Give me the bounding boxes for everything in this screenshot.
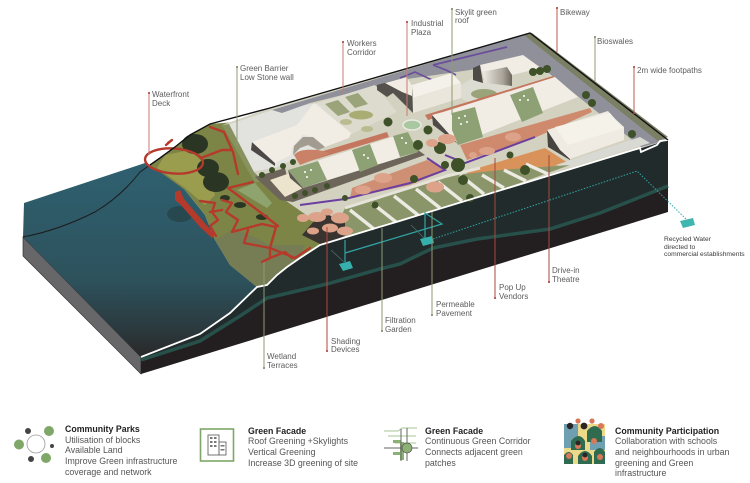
- legend: community parks: [14, 424, 178, 477]
- callout: shading devices: Shading: [331, 337, 360, 346]
- back edge: [150, 33, 668, 165]
- front section face: [141, 140, 668, 374]
- salmon plaza centre: [350, 160, 447, 198]
- storage tank three: [680, 218, 695, 228]
- text: community participation: Collaboration with schools: [615, 436, 718, 446]
- callout: skylit green roof: [451, 8, 497, 115]
- text: green facade roof: Green Facade: [248, 426, 306, 436]
- callout: waterfront deck: Deck: [152, 99, 171, 108]
- text: community parks: Utilisation of blocks: [65, 435, 141, 445]
- water body: [23, 163, 257, 357]
- gravel yard: [227, 103, 351, 172]
- salmon plaza right: [460, 108, 592, 160]
- legend: green corridor: [384, 426, 531, 468]
- text: community participation: infrastructure: [615, 468, 666, 478]
- callout: green barrier: Green Barrier: [240, 64, 289, 73]
- palm and canopy trees: [259, 65, 636, 208]
- text: green facade roof: Vertical Greening: [248, 447, 316, 457]
- orange yard: [465, 148, 568, 183]
- callout: wetland terraces: Wetland: [267, 352, 296, 361]
- building C: [377, 73, 461, 113]
- callout: shading devices: Devices: [331, 345, 359, 354]
- back lane: [272, 33, 668, 147]
- callout: green barrier: [236, 64, 294, 146]
- garden beds: [330, 164, 570, 240]
- storage tank two: [420, 236, 434, 246]
- water feature: [403, 120, 421, 130]
- cream patch: [270, 173, 303, 197]
- plaza courtyard: [317, 85, 397, 135]
- text: community parks: Community Parks: [65, 424, 140, 434]
- legend: community participation: [564, 418, 730, 478]
- wetland land: [150, 122, 335, 287]
- callout: pop up vendors: Vendors: [499, 292, 528, 301]
- text: community parks: Available Land: [65, 445, 123, 455]
- salmon street back: [425, 76, 556, 120]
- text: community participation: greening and Green: [615, 458, 693, 468]
- brown road: [255, 150, 425, 202]
- text: green facade roof: [248, 426, 358, 468]
- site ground: [222, 33, 668, 245]
- callout: recycled water: commercial establishments: [664, 251, 745, 258]
- wetland trees: [182, 134, 268, 220]
- site block model: [23, 33, 695, 374]
- text: green facade roof: Increase 3D greening of site: [248, 458, 358, 468]
- callout: filtration garden: Garden: [385, 325, 412, 334]
- callout: permeable pavement: Permeable: [436, 300, 475, 309]
- callout: bikeway: [556, 7, 590, 52]
- text: green corridor: Connects adjacent green: [425, 447, 523, 457]
- text: community parks: coverage and network: [65, 467, 152, 477]
- callout: footpaths: [633, 66, 702, 114]
- text: community participation: [615, 426, 730, 478]
- text: green corridor: Green Facade: [425, 426, 483, 436]
- green band: [222, 124, 262, 183]
- back lane cycle path: [400, 47, 507, 88]
- salmon street: [300, 132, 389, 164]
- callout: bikeway: Bikeway: [560, 8, 590, 17]
- callout: workers corridor: Workers: [347, 39, 377, 48]
- shoreline contour: [23, 165, 150, 237]
- callout: pop up vendors: [494, 158, 528, 301]
- callout: workers corridor: Corridor: [347, 48, 376, 57]
- text: community parks: Improve Green infrastructure: [65, 456, 178, 466]
- red wetland boardwalks: [144, 127, 310, 262]
- groundwater stripe: [141, 186, 668, 360]
- groundwater layer: [141, 140, 668, 359]
- callout: recycled water: [664, 236, 745, 258]
- callout: industrial plaza: Industrial: [411, 19, 444, 28]
- callout: wetland terraces: [263, 262, 298, 370]
- storage tank one: [339, 261, 353, 271]
- text: green corridor: Continuous Green Corridor: [425, 436, 531, 446]
- callout: waterfront deck: [148, 90, 190, 155]
- callout: drive-in theatre: Theatre: [552, 275, 580, 284]
- callout: drive-in theatre: [548, 155, 580, 284]
- callout: skylit green roof: Skylit green: [455, 8, 497, 17]
- callout: drive-in theatre: Drive-in: [552, 266, 580, 275]
- building E: [432, 77, 578, 145]
- icon: community parks circles: [14, 426, 54, 463]
- callout: workers corridor: [342, 39, 377, 93]
- callout: industrial plaza: [406, 19, 444, 116]
- text: green facade roof: Roof Greening +Skylights: [248, 436, 349, 446]
- building A: [251, 103, 351, 166]
- text: community parks: [65, 424, 178, 477]
- icon: community crowd illustration: [564, 418, 605, 464]
- building D: [473, 55, 541, 86]
- salmon shade canopies: [297, 132, 521, 236]
- water treatment pipes: [331, 171, 687, 262]
- callout: pop up vendors: Pop Up: [499, 283, 526, 292]
- building B: [288, 132, 418, 189]
- callout: recycled water: Recycled Water: [664, 236, 712, 243]
- callout: green barrier: Low Stone wall: [240, 73, 294, 82]
- callout: industrial plaza: Plaza: [411, 28, 432, 37]
- lower wetland: [215, 228, 305, 287]
- floating deck: [175, 190, 215, 238]
- building F: [547, 111, 624, 160]
- callout: wetland terraces: Terraces: [267, 361, 298, 370]
- callout: recycled water: directed to: [664, 244, 696, 251]
- callout: bioswales: Bioswales: [597, 37, 633, 46]
- bioswale strip: [524, 33, 668, 141]
- callout: filtration garden: Filtration: [385, 316, 416, 325]
- left side face: [23, 237, 141, 374]
- callout: waterfront deck: Waterfront: [152, 90, 190, 99]
- wetland shadow in water: [167, 206, 193, 222]
- callout: bioswales: [594, 36, 633, 81]
- callout: permeable pavement: [431, 212, 475, 318]
- front edge: [141, 140, 668, 357]
- icon: green corridor map: [384, 428, 418, 461]
- pale pavement: [556, 137, 650, 167]
- vendor area shade: [302, 212, 345, 245]
- text: community participation: and neighbourhoods in urban: [615, 447, 730, 457]
- callout: footpaths: 2m wide footpaths: [637, 66, 702, 75]
- callout: filtration garden: [381, 228, 416, 334]
- callout: skylit green roof: roof: [455, 16, 470, 25]
- text: green corridor: patches: [425, 458, 456, 468]
- lawn: [237, 183, 272, 208]
- legend: green facade roof: [200, 426, 358, 468]
- upper terrace: [157, 150, 215, 205]
- text: community participation: Community Participation: [615, 426, 719, 436]
- purple cycle path: [300, 137, 535, 205]
- text: green corridor: [425, 426, 531, 468]
- second courtyard: [461, 78, 512, 103]
- icon: building in green frame: [200, 429, 234, 461]
- callout: shading devices: [326, 227, 360, 354]
- callout: permeable pavement: Pavement: [436, 309, 473, 318]
